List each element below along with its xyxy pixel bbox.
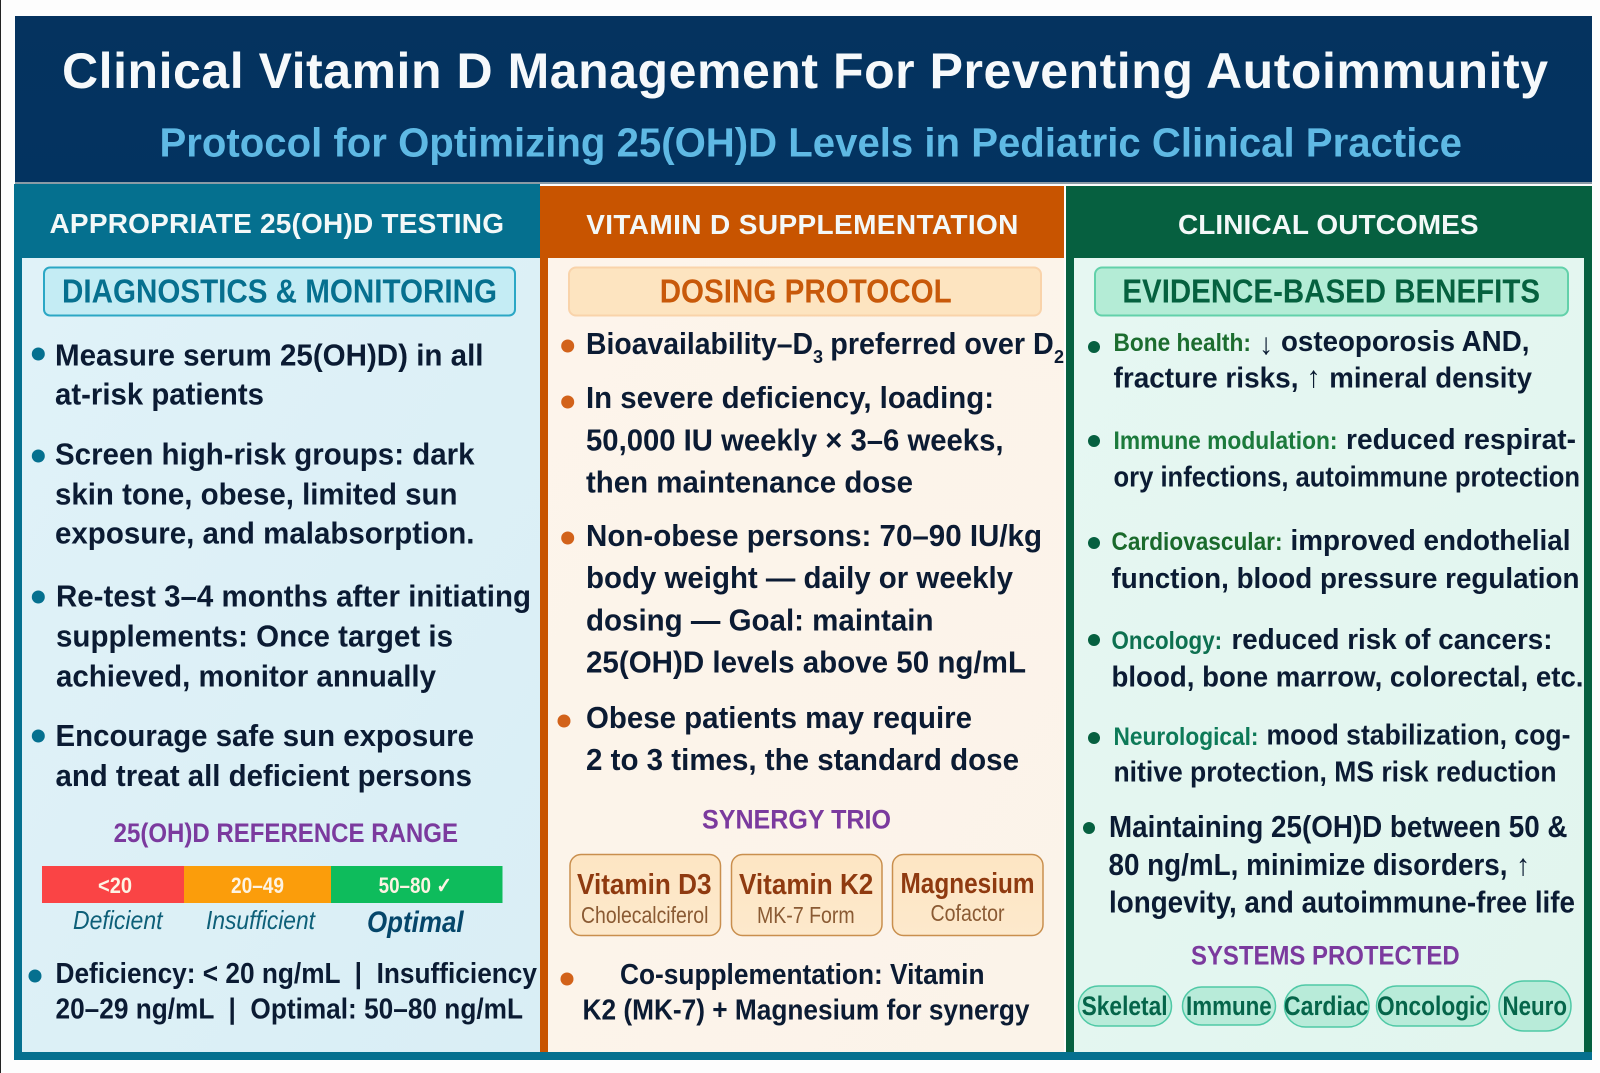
bullet: cardiovascular — [1088, 525, 1580, 595]
section heading: diagnostics and monitoring: DIAGNOSTICS & MONITORING — [62, 274, 497, 310]
synergy trio heading: SYNERGY TRIO — [702, 804, 891, 834]
bullet: maintaining levels: ↑ — [1516, 849, 1530, 882]
bullet: neurological: nitive protection, MS risk reduction — [1114, 756, 1556, 788]
bullet: neurological: mood stabilization, cog- — [1266, 720, 1570, 752]
bullet: cardiovascular: Cardiovascular: — [1112, 528, 1282, 556]
bullet: safe sun exposure — [32, 718, 474, 793]
bullet: obese patients: Obese patients may require — [586, 701, 972, 735]
range labels: Optimal — [367, 906, 464, 939]
bullet: measure serum: Measure serum 25(OH)D) in all — [55, 338, 484, 372]
bullet: co-supplementation: Co-supplementation: Vitamin — [620, 959, 984, 991]
bullet: non-obese persons: body weight — daily or weekly — [586, 561, 1013, 595]
column heading: outcomes: CLINICAL OUTCOMES — [1178, 209, 1478, 240]
section heading: dosing protocol: DOSING PROTOCOL — [660, 274, 952, 310]
bullet: non-obese persons — [561, 519, 1042, 680]
bullet: bone health: fracture risks, — [1114, 362, 1298, 394]
title: Clinical Vitamin D Management For Preventing Autoimmunity — [62, 43, 1548, 99]
header banner — [15, 16, 1592, 184]
bullet: co-supplementation — [560, 959, 1030, 1026]
bullet: bone health: osteoporosis AND, — [1281, 326, 1529, 358]
bullet: measure serum: at-risk patients — [55, 376, 264, 412]
section heading: evidence-based benefits — [1095, 268, 1568, 316]
column heading: supplementation: VITAMIN D SUPPLEMENTATION — [586, 209, 1018, 240]
card: vitamin K2 — [732, 854, 882, 936]
pill: oncologic: Oncologic — [1377, 991, 1488, 1021]
bullet: co-supplementation: K2 (MK-7) + Magnesium for synergy — [582, 994, 1030, 1026]
bullet: re-test — [32, 578, 531, 694]
bullet: immune modulation: Immune modulation: — [1114, 427, 1338, 455]
bullet: maintaining levels: 80 ng/mL, minimize disorders, — [1108, 847, 1508, 882]
bullet: severe deficiency: then maintenance dose — [586, 466, 913, 500]
panel: vitamin D supplementation — [540, 186, 1064, 1052]
section heading: dosing protocol — [569, 268, 1041, 316]
pill: cardiac: Cardiac — [1284, 991, 1368, 1021]
card: vitamin D3: Vitamin D3 — [577, 869, 712, 901]
range labels: Insufficient — [206, 905, 317, 935]
bullet: screen high-risk groups: skin tone, obese, limited sun — [55, 476, 458, 512]
bullet: bone health: ↑ — [1306, 361, 1320, 394]
range labels: Deficient — [73, 905, 164, 935]
bullet: maintaining levels — [1083, 809, 1575, 920]
bullet: bioavailability: Bioavailability–D — [586, 327, 813, 361]
card: magnesium: Cofactor — [930, 900, 1005, 926]
bullet: oncology: Oncology: — [1112, 627, 1222, 655]
bullet: obese patients — [558, 701, 1019, 777]
bullet: severe deficiency: In severe deficiency, loading: — [586, 381, 994, 415]
bullet: severe deficiency — [561, 381, 1004, 500]
systems protected heading: SYSTEMS PROTECTED — [1191, 940, 1460, 970]
bullet: neurological — [1088, 720, 1570, 788]
bullet: severe deficiency: 50,000 IU weekly × 3–6 weeks, — [586, 424, 1004, 458]
reference range bar: <20 — [98, 873, 132, 898]
bullet: bone health — [1088, 326, 1532, 394]
bottom band — [14, 1052, 1592, 1060]
column heading: testing: APPROPRIATE 25(OH)D TESTING — [50, 208, 504, 239]
bullet: oncology: reduced risk of cancers: — [1232, 624, 1552, 656]
reference range bar: 20–49 — [231, 873, 284, 898]
card: magnesium — [892, 854, 1043, 936]
bullet: non-obese persons: dosing — Goal: maintain — [586, 604, 934, 638]
pill: neuro: Neuro — [1502, 991, 1567, 1021]
pill: skeletal: Skeletal — [1082, 991, 1168, 1021]
bullet: screen high-risk groups: exposure, and malabsorption. — [55, 516, 474, 550]
bullet: bone health: ↓ — [1259, 328, 1273, 361]
subtitle: Protocol for Optimizing 25(OH)D Levels in Pediatric Clinical Practice — [160, 120, 1462, 166]
bullet: deficiency thresholds: 20–29 ng/mL | Optimal: 50–80 ng/mL — [56, 994, 523, 1026]
bullet: safe sun exposure: Encourage safe sun exposure — [56, 718, 474, 753]
pill: oncologic — [1376, 986, 1490, 1026]
bullet: non-obese persons: Non-obese persons: 70–90 IU/kg — [586, 519, 1042, 553]
bullet: screen high-risk groups — [32, 436, 475, 550]
bullet: re-test: Re-test 3–4 months after initiating — [56, 578, 531, 614]
pill: immune — [1182, 987, 1276, 1025]
bullet: screen high-risk groups: Screen high-risk groups: dark — [55, 436, 475, 472]
bullet: neurological: Neurological: — [1114, 723, 1258, 751]
section heading: evidence-based benefits: EVIDENCE-BASED BENEFITS — [1122, 274, 1540, 310]
range labels — [73, 905, 464, 939]
bullet: bioavailability: 2 — [1054, 347, 1064, 367]
panel: appropriate 25(OH)D testing — [14, 184, 540, 1060]
bullet: deficiency thresholds: Deficiency: < 20 ng/mL | Insufficiency — [56, 958, 537, 990]
bullet: bioavailability: preferred over D — [830, 327, 1054, 361]
bullet: safe sun exposure: and treat all deficient persons — [56, 758, 472, 793]
card: magnesium: Magnesium — [900, 868, 1034, 900]
pill: skeletal — [1078, 986, 1172, 1026]
bullet: obese patients: 2 to 3 times, the standard dose — [586, 743, 1019, 777]
bullet: non-obese persons: 25(OH)D levels above 50 ng/mL — [586, 646, 1026, 680]
reference range bar: 50–80 ✓ — [379, 873, 452, 898]
bullet: re-test: supplements: Once target is — [56, 618, 453, 654]
pill: neuro — [1499, 981, 1571, 1031]
pill: immune: Immune — [1186, 991, 1272, 1021]
bullet: oncology: blood, bone marrow, colorectal, etc. — [1112, 662, 1584, 694]
bullet: bone health: Bone health: — [1114, 329, 1251, 357]
section heading: diagnostics and monitoring — [44, 268, 515, 316]
reference range heading: 25(OH)D REFERENCE RANGE — [114, 818, 458, 848]
bullet: cardiovascular: function, blood pressure regulation — [1112, 563, 1580, 595]
card: vitamin D3 — [570, 854, 720, 936]
card: vitamin K2: Vitamin K2 — [739, 869, 873, 901]
bullet: immune modulation: reduced respirat- — [1346, 424, 1576, 456]
bullet: oncology — [1088, 624, 1584, 694]
card: vitamin D3: Cholecalciferol — [581, 902, 708, 928]
bullet: immune modulation — [1088, 424, 1580, 494]
bullet: deficiency thresholds — [28, 958, 537, 1026]
panel: clinical outcomes — [1066, 186, 1592, 1052]
bullet: bioavailability — [561, 327, 1064, 367]
pill: cardiac — [1284, 985, 1369, 1027]
bullet: bone health: mineral density — [1329, 362, 1532, 394]
card: vitamin K2: MK-7 Form — [757, 902, 855, 928]
reference range bar — [42, 866, 502, 903]
bullet: bioavailability: 3 — [813, 347, 823, 367]
bullet: re-test: achieved, monitor annually — [56, 658, 437, 694]
bullet: cardiovascular: improved endothelial — [1290, 525, 1570, 557]
bullet: measure serum — [32, 338, 484, 412]
